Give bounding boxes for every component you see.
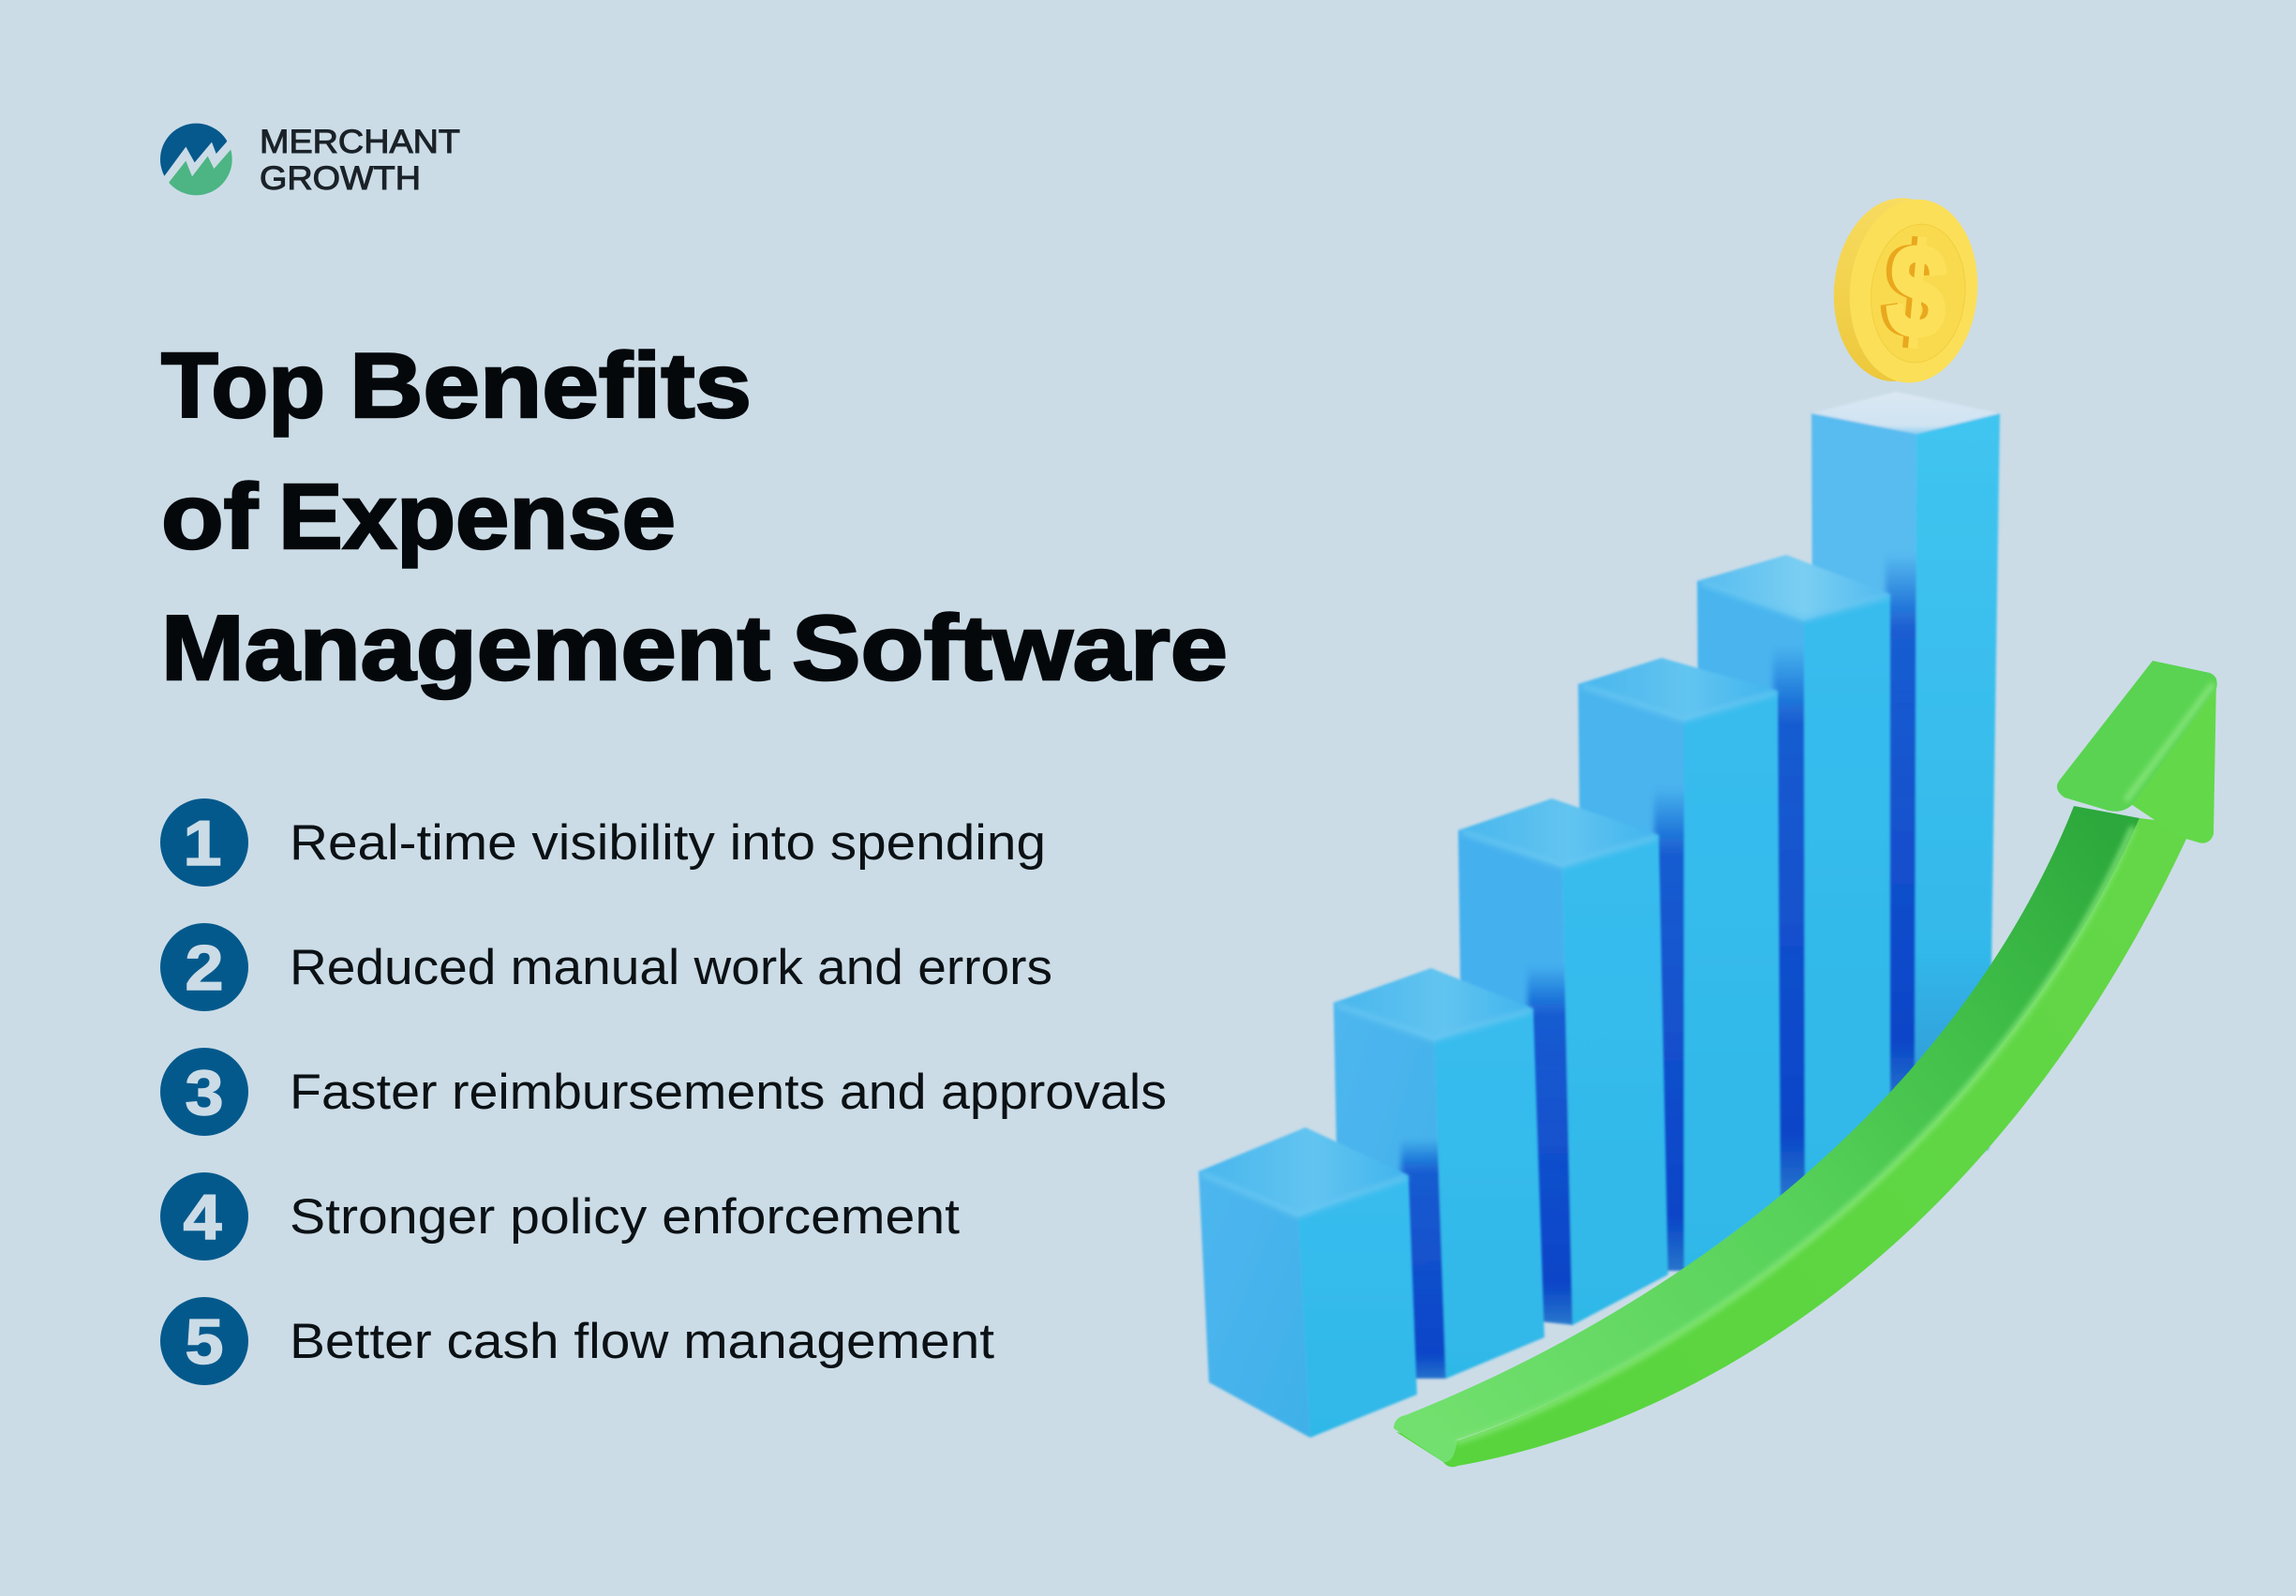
benefit 1: Real-time visibility into spending [290, 815, 1046, 871]
benefit 4: 4 [184, 1182, 222, 1253]
title: Software [792, 596, 1228, 699]
benefit 1 [160, 798, 1046, 887]
bar 1 [1199, 1127, 1417, 1438]
benefit 3 [160, 1048, 1167, 1136]
arrow head right face [2120, 678, 2216, 843]
logo mark [160, 124, 232, 195]
logo wordmark: GROWTH [260, 160, 421, 197]
bar 4 [1578, 658, 1781, 1275]
benefit 5: Better cash flow management [290, 1314, 994, 1369]
icon: gold dollar coin: $ [1876, 215, 1947, 366]
icon: gold dollar coin: $ [1882, 216, 1953, 366]
title: Expense [278, 465, 676, 568]
benefit 5: 5 [186, 1306, 223, 1378]
bar 5 [1697, 555, 1890, 1200]
bar 2 [1334, 968, 1544, 1382]
benefit 5 [160, 1297, 994, 1385]
arrow head top face [2057, 661, 2217, 812]
bar 6 [1811, 392, 2000, 1181]
benefit 3: 3 [186, 1057, 223, 1128]
benefits list [160, 798, 1167, 1385]
icon: gold dollar coin [1826, 193, 1985, 388]
title [161, 334, 1228, 699]
benefit 4: Stronger policy enforcement [290, 1189, 960, 1245]
title: Management [161, 596, 770, 699]
title: Benefits [350, 334, 752, 437]
title: Top [161, 334, 325, 437]
logo wordmark [260, 124, 460, 197]
logo [160, 124, 460, 195]
bar 3 [1458, 798, 1668, 1326]
benefit 3: Faster reimbursements and approvals [290, 1065, 1167, 1120]
arrow shaft upper face [1394, 806, 2139, 1462]
icon: 3D bar chart with arrow and coin [1199, 193, 2217, 1467]
benefit 2: 2 [186, 932, 223, 1004]
benefit 2 [160, 923, 1052, 1011]
logo wordmark: MERCHANT [260, 124, 460, 160]
infographic canvas [160, 124, 2217, 1468]
benefit 1: 1 [184, 808, 221, 879]
benefit 2: Reduced manual work and errors [290, 940, 1052, 995]
benefit 4 [160, 1172, 960, 1260]
arrow shaft lower face [1396, 818, 2193, 1467]
title: of [161, 465, 258, 568]
arrow: green growth arrow [1394, 661, 2217, 1467]
